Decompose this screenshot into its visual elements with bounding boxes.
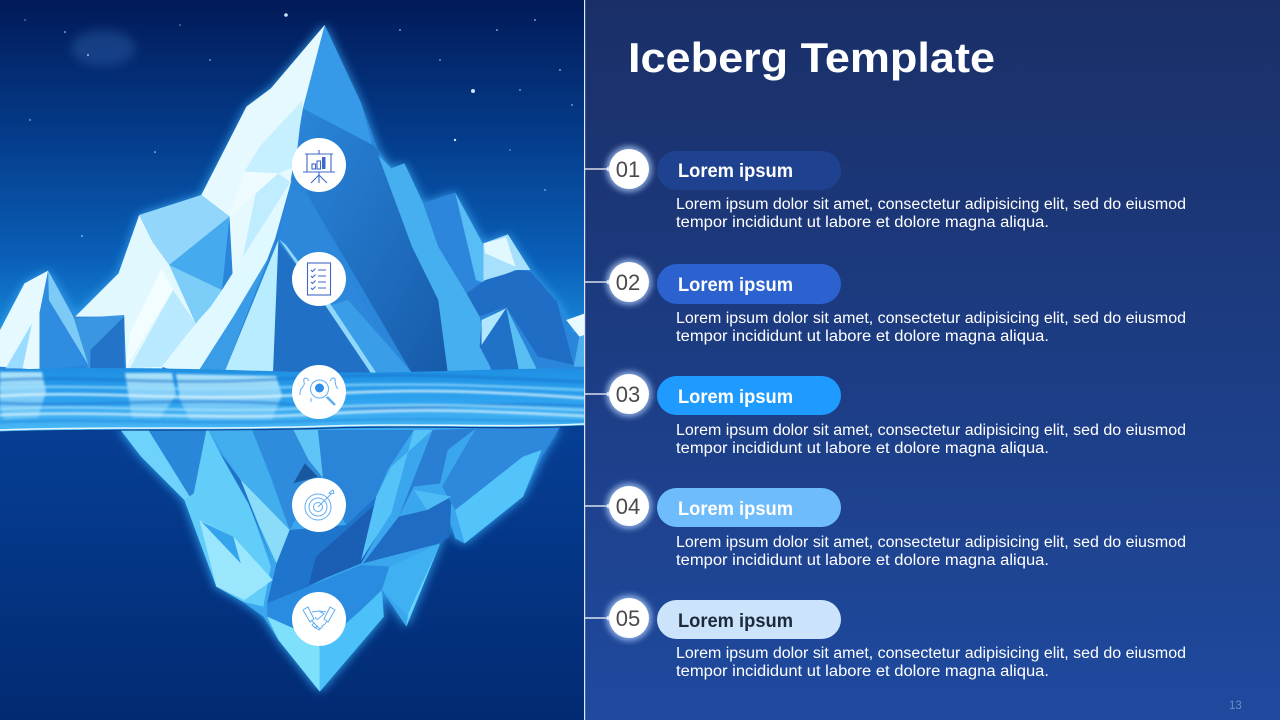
page number: 13 — [1229, 700, 1242, 712]
iceberg above water — [0, 25, 590, 380]
icon: handshake — [292, 592, 346, 646]
icon: presentation board — [292, 138, 346, 192]
number marker 05: 05 — [616, 606, 640, 631]
pill 05 — [657, 600, 841, 639]
text 04: tempor incididunt ut labore et dolore magna aliqua. — [676, 552, 1049, 569]
divider line — [584, 0, 585, 720]
pill 03: Lorem ipsum — [678, 387, 793, 408]
title: Iceberg Template — [628, 34, 995, 81]
number marker 01 — [585, 146, 652, 192]
text 01 — [676, 196, 1186, 231]
text 03: Lorem ipsum dolor sit amet, consectetur adipisicing elit, sed do eiusmod — [676, 422, 1186, 439]
text 02: tempor incididunt ut labore et dolore magna aliqua. — [676, 328, 1049, 345]
pill 05: Lorem ipsum — [678, 611, 793, 632]
text 05 — [676, 645, 1186, 680]
item 02 — [585, 259, 1186, 345]
number marker 02: 02 — [616, 270, 640, 295]
pill 01: Lorem ipsum — [678, 161, 793, 182]
number marker 01: 01 — [616, 157, 640, 182]
text 05: tempor incididunt ut labore et dolore magna aliqua. — [676, 663, 1049, 680]
text 02 — [676, 310, 1186, 345]
item 03 — [585, 371, 1186, 457]
number marker 03: 03 — [616, 382, 640, 407]
text 01: Lorem ipsum dolor sit amet, consectetur adipisicing elit, sed do eiusmod — [676, 196, 1186, 213]
item 04 — [585, 483, 1186, 569]
number marker 02 — [585, 259, 652, 305]
pill 01 — [657, 151, 841, 190]
pill 04: Lorem ipsum — [678, 499, 793, 520]
number marker 05 — [585, 595, 652, 641]
stars and nebula — [24, 13, 573, 237]
pill 02 — [657, 264, 841, 304]
panel: iceberg illustration — [0, 0, 590, 720]
pill 02: Lorem ipsum — [678, 275, 793, 296]
number marker 04: 04 — [616, 494, 640, 519]
pill 04 — [657, 488, 841, 527]
icon: target — [292, 478, 346, 532]
text 04 — [676, 534, 1186, 569]
icon: people search — [292, 365, 346, 419]
text 04: Lorem ipsum dolor sit amet, consectetur adipisicing elit, sed do eiusmod — [676, 534, 1186, 551]
panel: right background — [585, 0, 1280, 720]
text 03 — [676, 422, 1186, 457]
text 05: Lorem ipsum dolor sit amet, consectetur adipisicing elit, sed do eiusmod — [676, 645, 1186, 662]
water surface — [0, 368, 584, 432]
number marker 03 — [585, 371, 652, 417]
iceberg below water — [119, 427, 560, 692]
item 05 — [585, 595, 1186, 680]
number marker 04 — [585, 483, 652, 529]
text 02: Lorem ipsum dolor sit amet, consectetur adipisicing elit, sed do eiusmod — [676, 310, 1186, 327]
item 01 — [585, 146, 1186, 231]
pill 03 — [657, 376, 841, 415]
icon: checklist — [292, 252, 346, 306]
text 01: tempor incididunt ut labore et dolore magna aliqua. — [676, 214, 1049, 231]
text 03: tempor incididunt ut labore et dolore magna aliqua. — [676, 440, 1049, 457]
